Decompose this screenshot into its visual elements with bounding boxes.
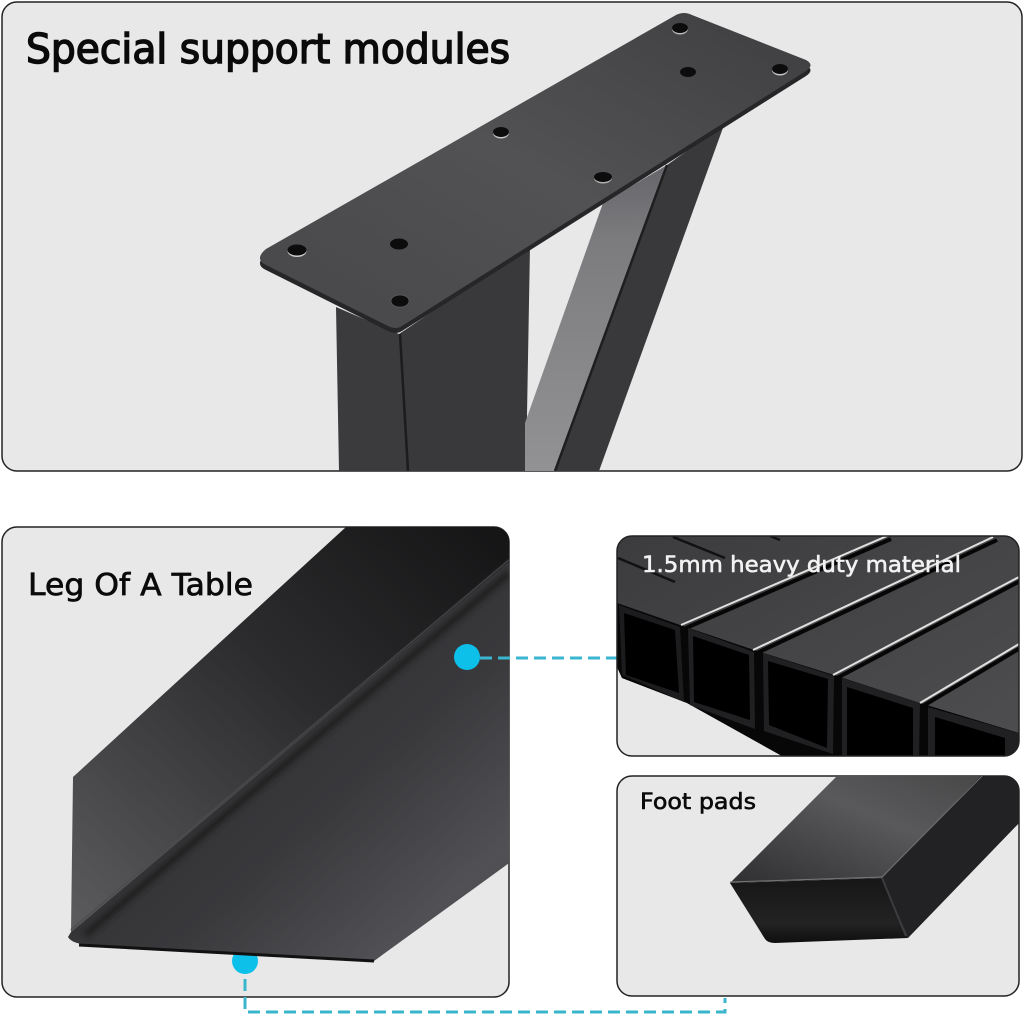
light background corner <box>617 667 782 756</box>
panel: foot pads <box>617 776 1022 996</box>
back tube gaps <box>618 536 780 582</box>
tube ends <box>619 605 684 702</box>
lower connector dot <box>232 948 258 974</box>
heading: Leg Of A Table <box>28 568 253 603</box>
panel: leg of a table <box>2 527 512 997</box>
heading: Special support modules <box>26 25 510 73</box>
mounting holes <box>288 23 788 307</box>
dashed connector to foot pads panel <box>245 979 725 1012</box>
heading: 1.5mm heavy duty material <box>642 553 961 578</box>
leg close-up <box>68 527 512 961</box>
panel: 1.5mm heavy duty material <box>617 536 1022 758</box>
dashed connector to material panel <box>480 656 617 660</box>
panel: special support modules <box>2 2 1022 471</box>
tube gap lines <box>681 536 1022 706</box>
dark underside behind tube ends <box>617 603 1019 756</box>
upper connector dot <box>454 644 480 670</box>
table leg with mounting plate <box>260 13 810 471</box>
heading: Foot pads <box>640 790 756 815</box>
foot of leg <box>730 776 1022 943</box>
